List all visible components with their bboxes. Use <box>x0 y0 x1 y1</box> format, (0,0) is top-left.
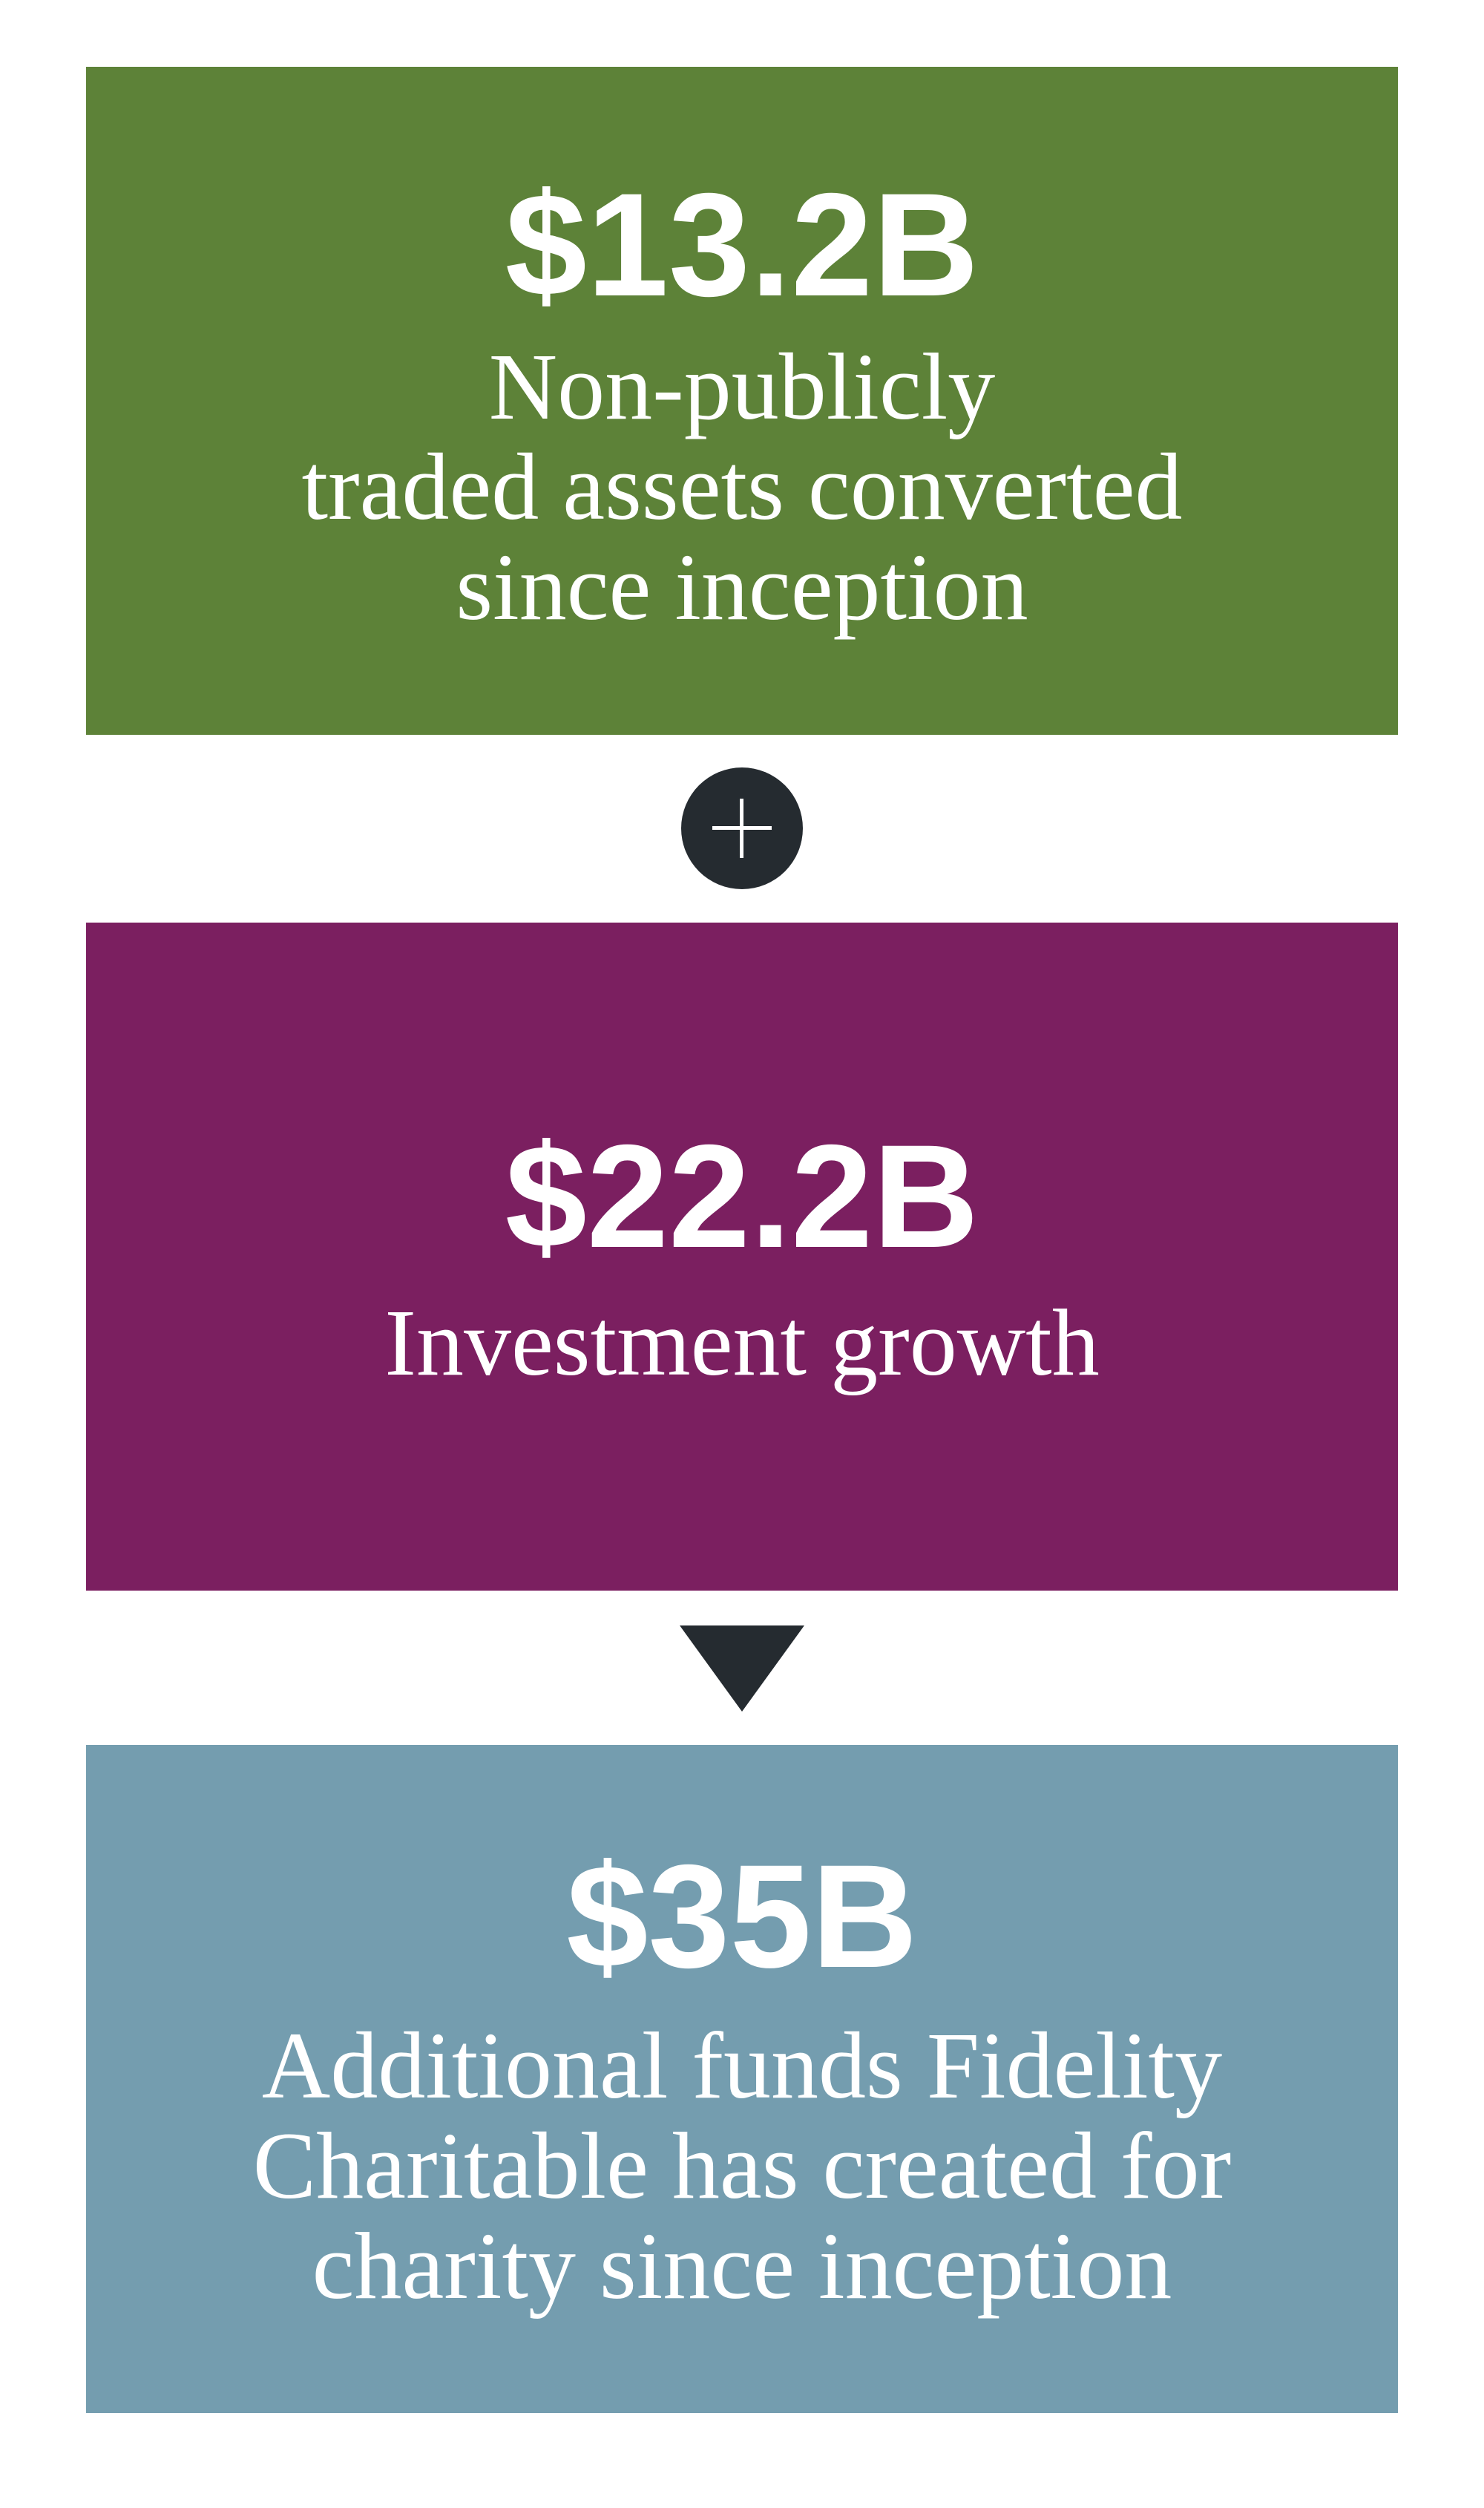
text: non-publicly traded assets converted: Non-publicly <box>489 334 995 439</box>
text: additional funds description: Additional funds Fidelity <box>262 2013 1222 2118</box>
panel: investment growth <box>86 923 1398 1591</box>
text: additional funds description <box>253 2013 1231 2319</box>
text: additional funds description: charity since inception <box>312 2213 1172 2319</box>
text: non-publicly traded assets converted <box>301 334 1183 640</box>
text: non-publicly traded assets converted: since inception <box>456 534 1028 640</box>
arrow: down triangle <box>680 1625 804 1712</box>
text: non-publicly traded assets converted: traded assets converted <box>301 434 1183 540</box>
panel: total funds created <box>86 1745 1398 2413</box>
panel: non-publicly traded assets <box>86 67 1398 735</box>
icon: plus circle <box>681 767 803 889</box>
heading: $22.2B: $22.2B <box>505 1114 979 1278</box>
heading: $35B: $35B <box>566 1834 918 1998</box>
text: additional funds description: Charitable has created for <box>253 2113 1231 2219</box>
text: investment growth: Investment growth <box>384 1290 1100 1395</box>
heading: $13.2B: $13.2B <box>505 163 979 327</box>
